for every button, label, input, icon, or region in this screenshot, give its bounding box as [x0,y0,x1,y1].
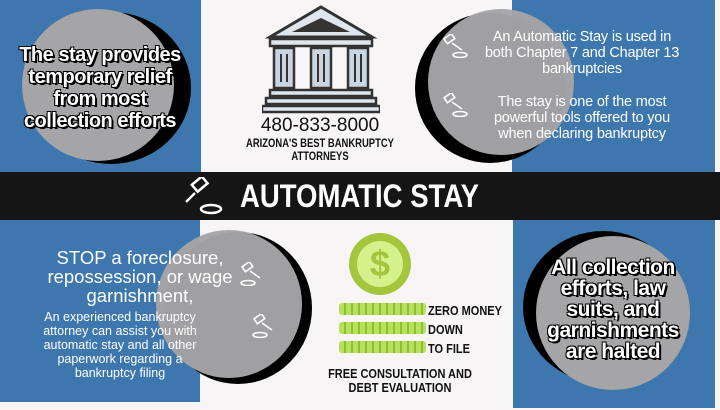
text: chapter 7 and 13: bankruptcies [542,61,622,77]
text: chapter 7 and 13: both Chapter 7 and Chapter 13 [485,45,679,61]
text: all collection halted: are halted [566,340,660,363]
text: zero money down [428,304,502,356]
icon: gavel 2 [443,93,468,117]
icon: gavel 3 [240,262,260,286]
text: experienced attorney [43,310,197,380]
text: stop foreclosure [47,247,233,306]
text: free consultation [328,367,472,395]
circle: top-left [18,9,191,164]
text: all collection halted: All collection [551,256,675,279]
icon: gavel 4 [252,314,272,338]
text: firm name: ARIZONA'S BEST BANKRUPTCY [246,138,394,150]
text: all collection halted: efforts, law [561,277,665,300]
circle: bottom-right [523,231,690,390]
text: stay provides relief [18,44,182,132]
text: stay provides relief: collection efforts [24,110,176,132]
panel: top-right blue [512,0,715,172]
text: stop foreclosure: STOP a foreclosure, [57,247,223,268]
icon: courthouse [262,5,380,114]
text: experienced attorney: An experienced bankruptcy [44,310,196,324]
text: all collection halted: garnishments [547,319,679,342]
text: zero money down: ZERO MONEY [428,304,502,318]
text: zero money down: DOWN [428,323,463,337]
text: chapter 7 and 13 [485,29,679,77]
text: firm name: ATTORNEYS [291,151,349,163]
text: all collection halted [547,256,680,363]
icon: gavel [185,177,222,214]
icon: dollar coin [349,233,411,295]
text: stop foreclosure: repossession, or wage [47,266,233,287]
text: stay provides relief: The stay provides [19,44,181,66]
title band [0,172,720,220]
panel: top-left blue [0,0,201,172]
text: chapter 7 and 13: An Automatic Stay is used in [493,29,671,45]
panel: bottom-left blue [0,220,200,402]
text: powerful tools: The stay is one of the most [498,94,666,110]
text: stay provides relief: from most [53,88,147,110]
text: stop foreclosure: garnishment, [87,285,193,306]
title: AUTOMATIC STAY [240,178,479,214]
text: experienced attorney: automatic stay and all other [44,338,196,352]
text: experienced attorney: bankruptcy filing [75,366,165,380]
icon: gavel 1 [443,34,468,58]
text: phone: 480-833-8000 [261,115,379,136]
text: experienced attorney: attorney can assist you with [43,324,197,338]
text: zero money down: TO FILE [428,342,470,356]
icon: dollar coin: $ [370,243,390,284]
panel: bottom-right blue [513,220,715,408]
circle: top-right [415,9,574,163]
text: firm name [246,138,394,163]
text: powerful tools [494,94,670,142]
text: powerful tools: powerful tools offered to you [494,110,670,126]
text: free consultation: FREE CONSULTATION AND [328,367,472,381]
text: powerful tools: when declaring bankruptcy [498,126,666,142]
money bars [339,303,426,353]
circle: bottom-left [156,230,312,384]
text: free consultation: DEBT EVALUATION [349,381,451,395]
text: experienced attorney: paperwork regarding a [57,352,183,366]
text: all collection halted: suits, and [566,298,660,321]
text: stay provides relief: temporary relief [28,66,172,88]
